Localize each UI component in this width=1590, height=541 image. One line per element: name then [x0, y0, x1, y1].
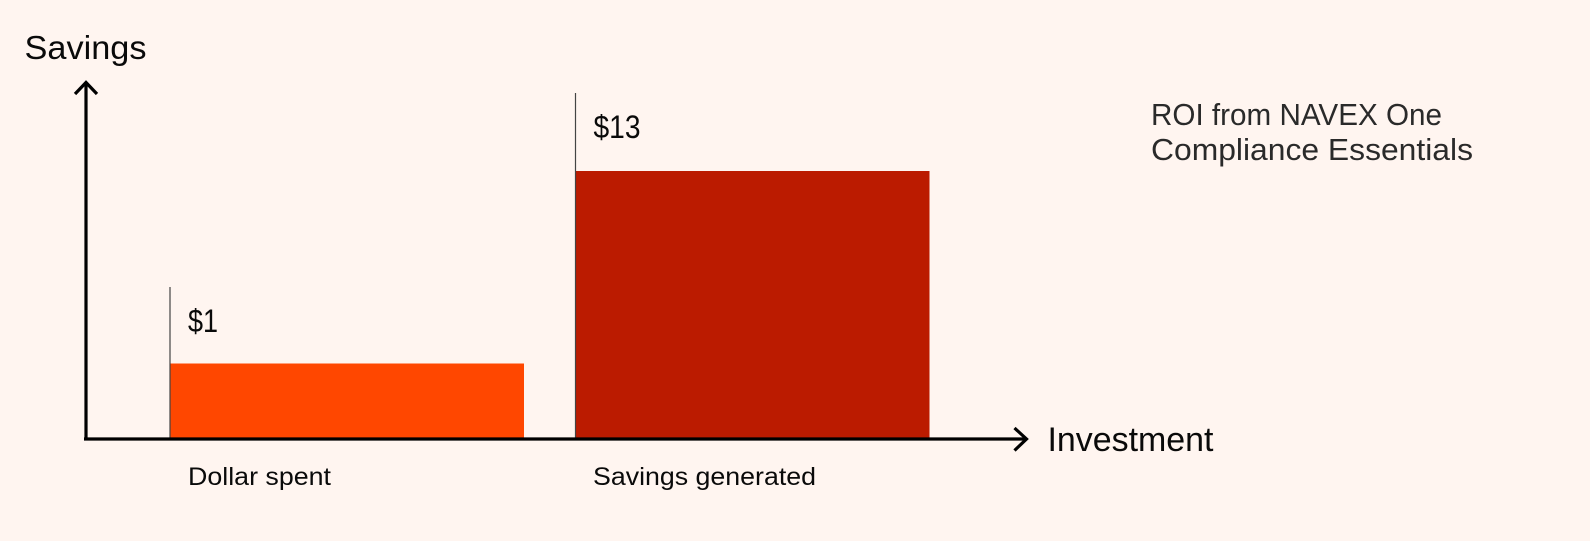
category label: dollar spent: Dollar spent — [188, 463, 331, 491]
value label: $13: $13 — [594, 109, 640, 145]
category label: savings generated: Savings generated — [593, 463, 816, 491]
chart title — [1151, 97, 1473, 167]
chart title: ROI from NAVEX One — [1151, 97, 1442, 132]
y axis label: Savings — [24, 29, 146, 66]
bar: dollar spent — [170, 287, 524, 438]
x axis label: Investment — [1048, 421, 1214, 459]
chart title: Compliance Essentials — [1151, 132, 1473, 167]
bar: savings generated — [576, 93, 930, 438]
value label: $1: $1 — [188, 303, 218, 339]
x axis arrow — [84, 428, 1026, 450]
y axis arrow — [75, 82, 97, 440]
